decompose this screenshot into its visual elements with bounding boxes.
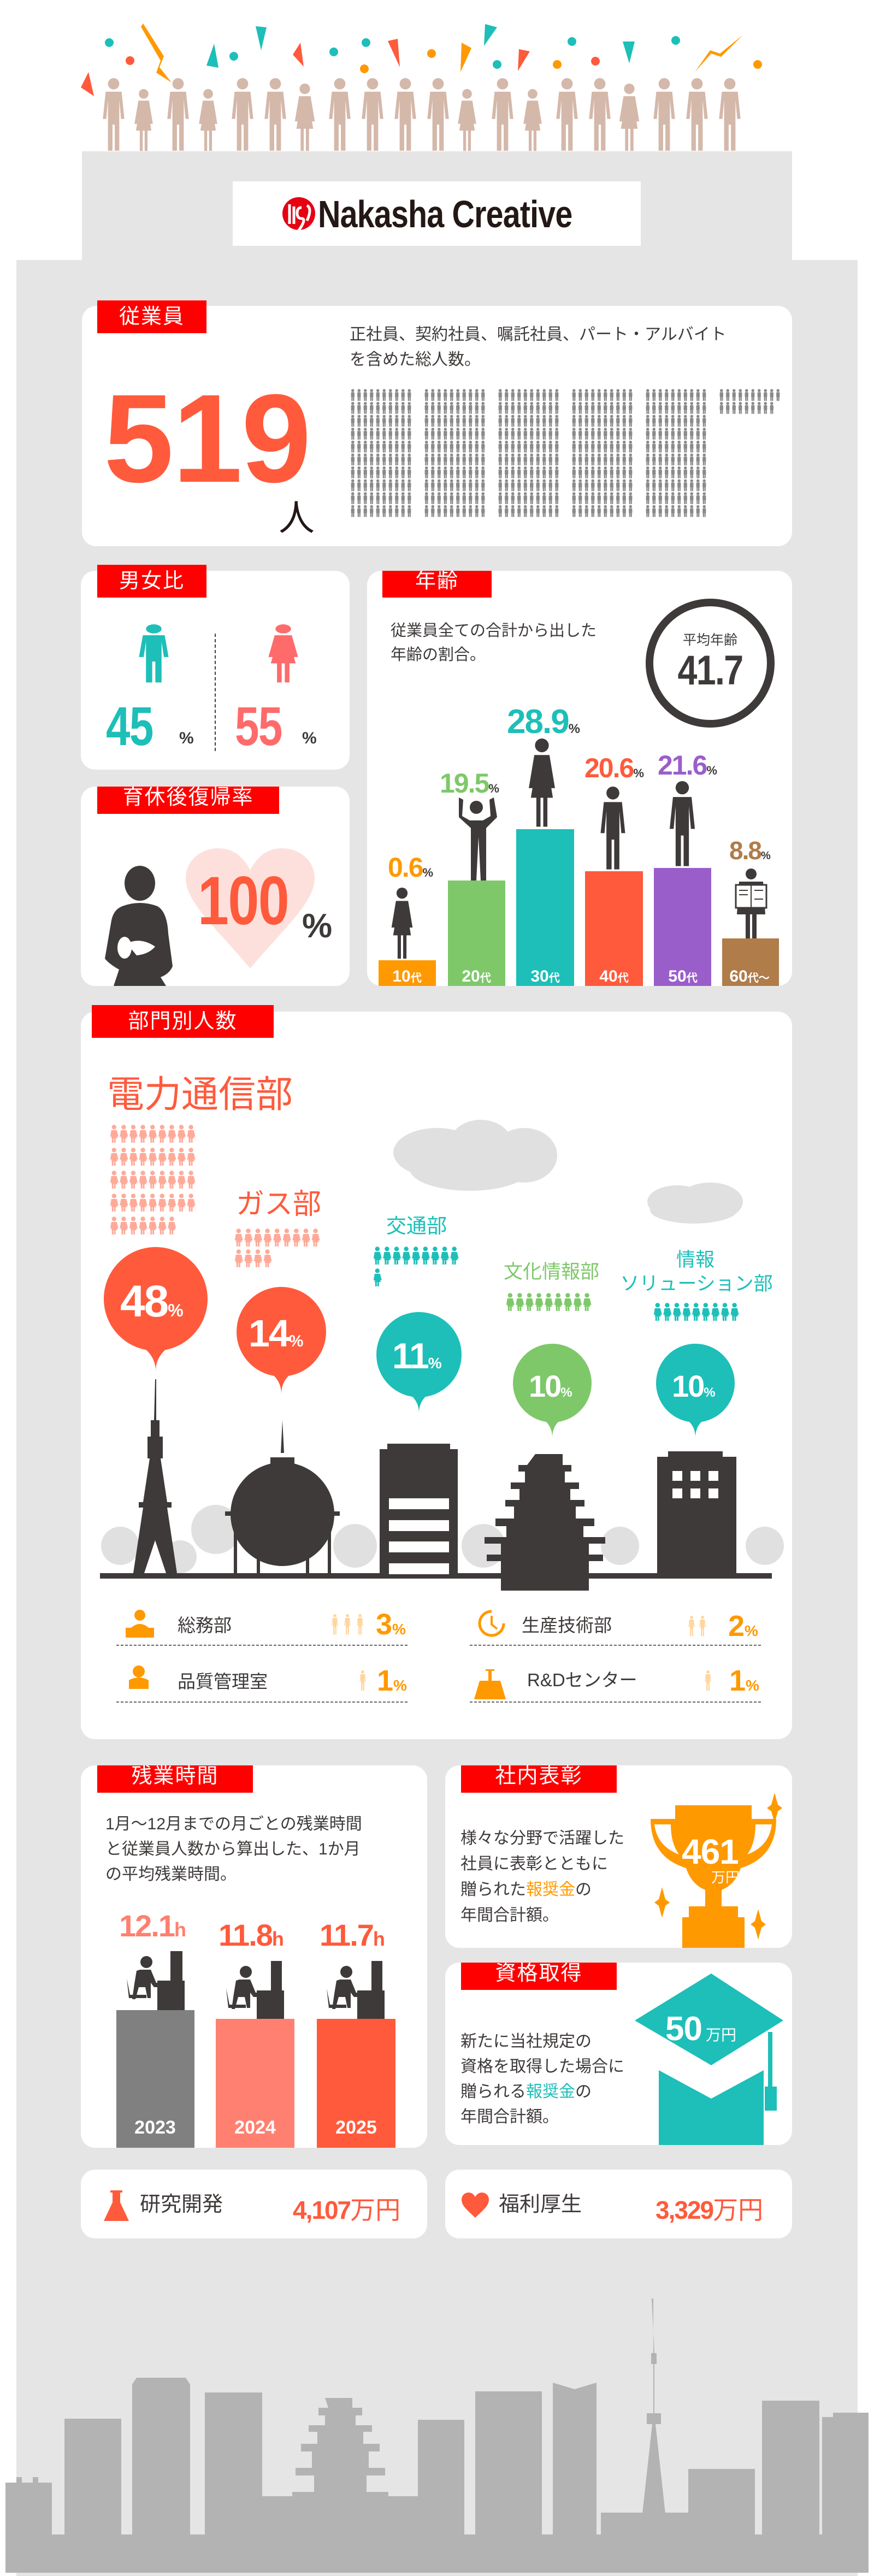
heading: 従業員: [119, 305, 185, 328]
overtime bar chart: 12.1h: [119, 1909, 185, 1943]
description: 贈られる報奨金の: [460, 2083, 592, 2101]
small departments list: 総務部: [178, 1615, 232, 1635]
overtime bar chart: 2024: [234, 2117, 276, 2138]
overtime bar chart: 2025: [335, 2117, 377, 2138]
unit: 人: [279, 498, 315, 538]
icon: trophy: 万円: [711, 1869, 740, 1886]
average age circle: 平均年齢: [683, 633, 737, 648]
pictograms: [109, 1125, 196, 1216]
small departments list: 品質管理室: [178, 1671, 268, 1692]
average age circle: 41.7: [678, 647, 742, 694]
small departments list: 3%: [376, 1608, 406, 1641]
icon: graduation cap: [635, 1974, 783, 2145]
icon: flask: [104, 2190, 129, 2221]
department names: 交通部: [386, 1215, 447, 1237]
department names: 電力通信部: [107, 1074, 293, 1115]
icon: female: [269, 624, 298, 683]
description: 社員に表彰とともに: [460, 1855, 608, 1873]
logo mark: [282, 197, 315, 230]
bar chart: 10代: [392, 967, 422, 985]
info building: [657, 1451, 736, 1576]
department illustration: 14%: [249, 1312, 303, 1355]
heading: 男女比: [119, 570, 185, 593]
description: [460, 1829, 624, 1924]
heading: [461, 1957, 617, 1990]
panel: welfare spending: [445, 2170, 792, 2238]
bar chart: 0.6%: [388, 852, 433, 883]
heading: [461, 1760, 617, 1793]
icon: trophy: [651, 1793, 782, 1948]
panel: gender ratio: [81, 571, 350, 770]
bar chart: 40代: [599, 967, 629, 985]
heading: 社内表彰: [495, 1765, 582, 1788]
overtime bar chart: 2023: [134, 2117, 176, 2138]
department illustration: 48%: [120, 1277, 183, 1326]
bar chart: 60代～: [729, 967, 770, 985]
heading: [97, 781, 279, 814]
icon: male: [139, 624, 169, 683]
icon: heart: [186, 848, 315, 968]
small departments list: [116, 1608, 761, 1703]
overtime bar chart: [116, 1909, 395, 2148]
bar chart: [379, 707, 779, 986]
panel: awards: [445, 1765, 792, 1948]
panel: departments: [81, 1012, 792, 1739]
bar chart: 50代: [668, 967, 698, 985]
pictogram grid: [351, 389, 780, 517]
logo text: Nakasha Creative: [318, 193, 572, 235]
description: [391, 622, 597, 664]
description: [350, 326, 727, 369]
bar chart: 20代: [462, 967, 491, 985]
icon: heart: [462, 2193, 489, 2218]
icon: graduation cap: 50: [665, 2010, 702, 2048]
city skyline: [5, 2299, 869, 2573]
bar chart: 30代: [530, 967, 560, 985]
panel: certifications: [445, 1963, 792, 2145]
bar chart: 19.5%: [440, 768, 499, 799]
description: [460, 2033, 624, 2126]
heading: [97, 565, 206, 598]
description: と従業員人数から算出した、1か月: [105, 1840, 361, 1858]
small departments list: 1%: [377, 1664, 407, 1697]
panel: employees: [82, 306, 792, 546]
department names: ソリューション部: [620, 1273, 773, 1295]
crowd of employees: [103, 78, 741, 151]
description: の平均残業時間。: [105, 1865, 237, 1883]
tower: [133, 1379, 177, 1573]
description: を含めた総人数。: [350, 351, 481, 369]
confetti: [81, 23, 762, 96]
bubbles: [104, 1247, 735, 1438]
icon: mother with baby: [105, 866, 173, 986]
small departments list: 1%: [729, 1664, 759, 1697]
description: 正社員、契約社員、嘱託社員、パート・アルバイト: [350, 326, 727, 344]
description: [105, 1815, 362, 1883]
percentage 100: 100: [198, 863, 288, 939]
small departments list: 2%: [728, 1610, 758, 1643]
heading: 資格取得: [495, 1963, 582, 1985]
department names: [107, 1074, 773, 1295]
panel: R&D spending: [81, 2170, 427, 2238]
department names: ガス部: [236, 1189, 321, 1220]
icon: trophy: 461: [682, 1832, 739, 1871]
description: 贈られた報奨金の: [460, 1881, 592, 1899]
gas tank: [231, 1462, 334, 1566]
heading: [92, 1005, 274, 1038]
description: 新たに当社規定の: [460, 2033, 592, 2051]
office building: [380, 1444, 458, 1576]
trees: [101, 1505, 784, 1573]
overtime bar chart: 11.7h: [320, 1918, 384, 1952]
value: 3,329万円: [656, 2196, 763, 2224]
average age circle: [646, 599, 775, 728]
background building: [82, 151, 792, 266]
department illustration: 10%: [529, 1369, 572, 1403]
heading: [97, 1760, 253, 1793]
castle: [485, 1454, 605, 1591]
department names: 文化情報部: [504, 1261, 599, 1283]
heading: 部門別人数: [128, 1010, 237, 1033]
small departments list: 生産技術部: [522, 1615, 612, 1635]
panel: gender ratio: %: [179, 729, 193, 747]
bar chart: 21.6%: [658, 750, 717, 781]
description: 従業員全ての合計から出した: [391, 622, 597, 640]
big number: 519: [104, 368, 310, 509]
panel: parental leave return: [81, 787, 350, 986]
panel: parental leave return: %: [302, 907, 331, 945]
value: 4,107万円: [293, 2196, 400, 2224]
bar chart: 8.8%: [729, 836, 771, 865]
department illustration: 10%: [672, 1369, 715, 1403]
male percent: 45: [106, 696, 153, 757]
label: 福利厚生: [499, 2193, 582, 2216]
panel: overtime: [81, 1765, 427, 2148]
panel: age: [367, 571, 792, 986]
department illustration: 11%: [392, 1336, 442, 1376]
overtime bar chart: 11.8h: [218, 1918, 283, 1952]
panel: gender ratio: %: [302, 729, 316, 747]
heading: 育休後復帰率: [122, 787, 253, 809]
small departments list: R&Dセンター: [527, 1670, 637, 1690]
description: 年間合計額。: [460, 1906, 559, 1924]
description: 1月～12月までの月ごとの残業時間: [105, 1815, 362, 1833]
icon: graduation cap: 万円: [706, 2026, 736, 2043]
label: 研究開発: [140, 2193, 223, 2216]
bar chart: 20.6%: [584, 753, 643, 783]
department names: 情報: [676, 1249, 714, 1271]
description: 年齢の割合。: [391, 646, 486, 664]
description: 資格を取得した場合に: [460, 2058, 624, 2076]
heading: [382, 565, 492, 598]
department illustration: [100, 1074, 784, 1591]
logo: [233, 181, 641, 246]
female percent: 55: [235, 696, 282, 757]
description: 様々な分野で活躍した: [460, 1829, 624, 1847]
heading: 残業時間: [131, 1765, 218, 1788]
description: 年間合計額。: [460, 2108, 559, 2126]
clouds: [393, 1120, 743, 1224]
heading: [97, 300, 206, 333]
